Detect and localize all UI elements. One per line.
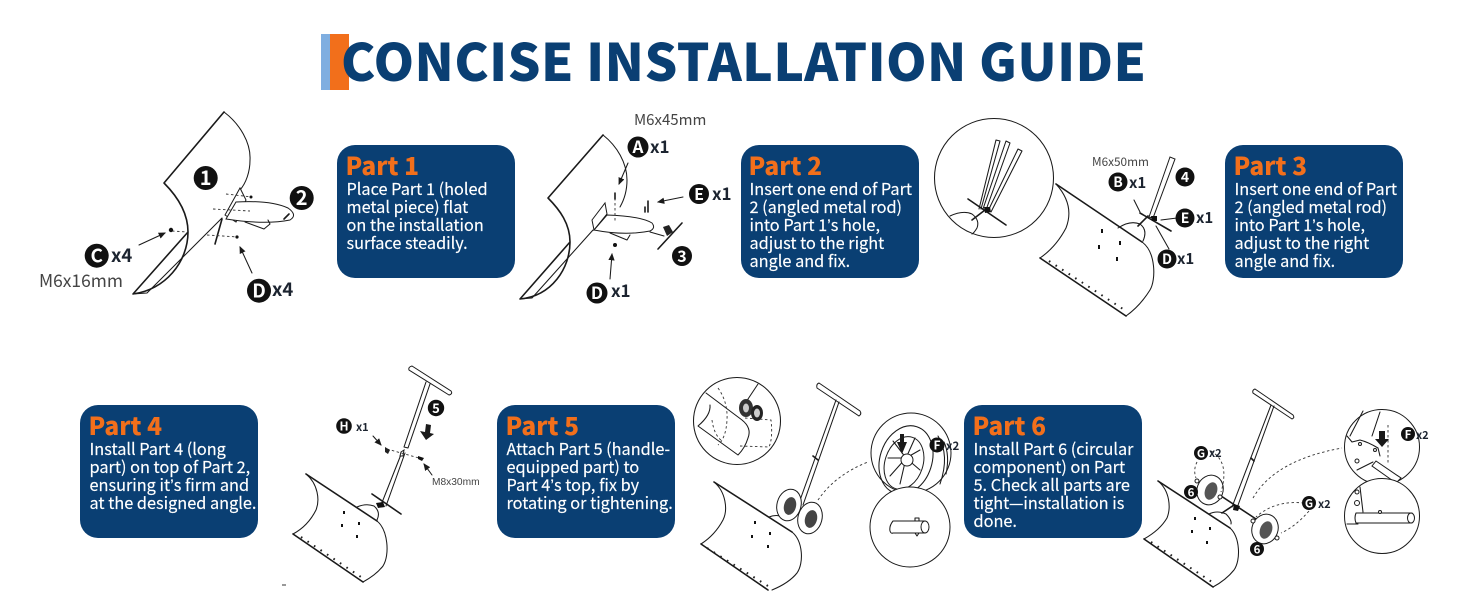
- bolt size label: M6x50mm: [1092, 153, 1149, 170]
- diagram: step 4: [293, 366, 480, 582]
- arrow to part A: [619, 163, 628, 184]
- badge G x2 left: x2: [1209, 445, 1222, 461]
- text: part 1 instructions: [346, 176, 488, 254]
- badge F x2: F: [933, 436, 941, 454]
- badge 5: [428, 398, 444, 417]
- handle: [1253, 389, 1294, 419]
- badge D x1: D: [591, 279, 603, 304]
- text: part 1 instructions: surface steadily.: [346, 230, 468, 254]
- badge C x4: x4: [111, 242, 132, 268]
- arrow to C: [139, 233, 165, 245]
- badge D x4: [247, 276, 293, 304]
- snow blade: [1040, 184, 1154, 316]
- badge 6 left: [1184, 484, 1198, 500]
- detail circle: axle bracket: [1344, 410, 1420, 484]
- heading: part 6: Part 6: [972, 408, 1046, 443]
- panel: part 6: [964, 405, 1142, 538]
- badge 1: 1: [200, 162, 212, 191]
- diagram: step 1: [39, 112, 314, 304]
- arrow to part E: [658, 197, 683, 202]
- badge B x1: [1108, 172, 1146, 193]
- text: part 4 instructions: Install Part 4 (long: [90, 436, 226, 460]
- heading: part 5: Part 5: [506, 408, 579, 443]
- badge D x1: [1158, 248, 1194, 269]
- badge H x1: H: [339, 418, 349, 434]
- text: part 6 instructions: done.: [974, 508, 1017, 532]
- wheels: [773, 486, 805, 524]
- snow blade: [1144, 481, 1239, 587]
- panel: part 1: [337, 145, 515, 278]
- badge F x2: [930, 436, 959, 454]
- panel: part 2: [741, 145, 919, 278]
- badge A x1: x1: [650, 133, 670, 158]
- diagram: step 5: [694, 378, 959, 590]
- text: part 2 instructions: adjust to the right: [750, 230, 884, 254]
- diagram: step 2: [520, 109, 732, 304]
- badge D x1: D: [1162, 249, 1172, 269]
- arrow to D: [240, 247, 252, 273]
- badge 5: 5: [432, 398, 440, 417]
- text: part 4 instructions: part) on top of Part 2,: [90, 454, 250, 478]
- badge G x2 right: G: [1305, 496, 1313, 512]
- text: part 1 instructions: on the installation: [346, 212, 484, 236]
- handle: [817, 383, 861, 416]
- heading: part 3: Part 3: [1234, 148, 1307, 183]
- badge 6 left: 6: [1188, 484, 1195, 500]
- snow blade: [701, 482, 801, 590]
- text: part 1 instructions: Place Part 1 (holed: [346, 176, 488, 200]
- badge 6 right: 6: [1254, 542, 1261, 558]
- diagram: step 6: [1144, 389, 1429, 587]
- text: part 4 instructions: at the designed angle.: [90, 490, 256, 514]
- bolt size label: M6x45mm: [634, 109, 706, 130]
- detail circle: wheels on blade: [694, 378, 780, 464]
- arrow to part D: [610, 254, 612, 279]
- text: part 6 instructions: 5. Check all parts are: [974, 472, 1130, 496]
- snow blade: [293, 474, 387, 582]
- handle: [409, 366, 452, 395]
- text: part 2 instructions: Insert one end of Part: [750, 176, 912, 200]
- title: CONCISE INSTALLATION GUIDE: [341, 21, 1146, 96]
- detail circle: axle: [870, 487, 950, 567]
- badge G x2 left: G: [1197, 446, 1205, 462]
- text: part 3 instructions: Insert one end of Part: [1234, 176, 1397, 200]
- badge E x1: E: [694, 181, 704, 205]
- text: part 2 instructions: angle and fix.: [750, 248, 850, 272]
- bolt size label: M6x16mm: [39, 268, 123, 293]
- badge H x1: [336, 418, 369, 435]
- badge A x1: A: [632, 133, 644, 158]
- panel: part 4: [80, 405, 258, 538]
- badge 6 right: [1250, 542, 1264, 558]
- badge G x2 right: x2: [1318, 496, 1331, 512]
- detail circle: axle: [1344, 478, 1420, 554]
- diagram: step 3: [934, 118, 1213, 316]
- text: part 6 instructions: Install Part 6 (circular: [974, 436, 1134, 460]
- badge 3: 3: [677, 243, 687, 267]
- badge D x4: D: [252, 276, 266, 304]
- text: part 5 instructions: Part 4’s top, fix by: [506, 472, 640, 496]
- detail circle: wheel: [870, 413, 951, 501]
- badge F x2: [1401, 426, 1429, 443]
- heading: part 4: Part 4: [88, 408, 162, 443]
- text: part 5 instructions: Attach Part 5 (handle-: [506, 436, 670, 460]
- badge H x1: x1: [356, 419, 369, 435]
- badge G x2 right: [1302, 496, 1331, 512]
- arrow to H: [373, 436, 381, 445]
- heading: part 1: Part 1: [346, 148, 419, 183]
- panel: part 3: [1225, 145, 1403, 278]
- badge E x1: [1176, 207, 1213, 228]
- text: part 4 instructions: ensuring it’s firm and: [90, 472, 249, 496]
- panel: part 5: [497, 405, 675, 538]
- badge 3: [672, 243, 692, 267]
- title bar accent: [321, 34, 349, 90]
- arrow: press down: [420, 424, 434, 440]
- text: part 2 instructions: [750, 176, 912, 272]
- badge C x4: [85, 242, 132, 268]
- text: part 6 instructions: tight—installation is: [974, 490, 1125, 514]
- badge B x1: B: [1113, 172, 1123, 192]
- wheels: [1193, 471, 1227, 509]
- badge B x1: x1: [1129, 172, 1146, 193]
- badge G x2 left: [1194, 445, 1222, 462]
- text: part 3 instructions: into Part 1’s hole,: [1234, 212, 1365, 236]
- badge F x2: x2: [1416, 427, 1429, 443]
- text: part 3 instructions: adjust to the right: [1234, 230, 1369, 254]
- text: part 5 instructions: equipped part) to: [506, 454, 639, 478]
- arrow: press down: [1375, 431, 1389, 447]
- text: part 4 instructions: [90, 436, 256, 514]
- text: part 6 instructions: component) on Part: [974, 454, 1125, 478]
- text: part 3 instructions: [1234, 176, 1397, 272]
- badge E x1: x1: [1196, 207, 1213, 228]
- badge 4: 4: [1181, 167, 1189, 187]
- text: part 5 instructions: [506, 436, 673, 514]
- detail circle: rod angles: [934, 118, 1054, 238]
- badge E x1: E: [1181, 208, 1189, 228]
- badge E x1: [689, 180, 732, 205]
- badge F x2: x2: [946, 438, 959, 454]
- badge E x1: x1: [712, 180, 732, 205]
- badge D x1: x1: [611, 277, 631, 302]
- text: part 2 instructions: into Part 1’s hole,: [750, 212, 880, 236]
- badge D x1: [586, 277, 631, 304]
- badge 2: [290, 182, 314, 211]
- arrow to bolt: [424, 464, 432, 475]
- heading: part 2: Part 2: [748, 148, 822, 183]
- badge 2: 2: [296, 182, 308, 211]
- badge 1: [194, 162, 218, 191]
- bolt size label: M8x30mm: [432, 477, 480, 488]
- badge A x1: [628, 133, 670, 158]
- badge D x4: x4: [272, 276, 293, 302]
- text: part 6 instructions: [974, 436, 1134, 532]
- text: part 5 instructions: rotating or tightening.: [506, 490, 673, 514]
- badge D x1: x1: [1177, 248, 1194, 269]
- badge C x4: C: [90, 242, 103, 268]
- text: part 3 instructions: angle and fix.: [1234, 248, 1335, 272]
- badge F x2: F: [1405, 426, 1412, 442]
- text: part 3 instructions: 2 (angled metal rod): [1234, 194, 1387, 218]
- badge 4: [1176, 167, 1194, 187]
- text: part 1 instructions: metal piece) flat: [346, 194, 468, 218]
- text: part 2 instructions: 2 (angled metal rod): [750, 194, 902, 218]
